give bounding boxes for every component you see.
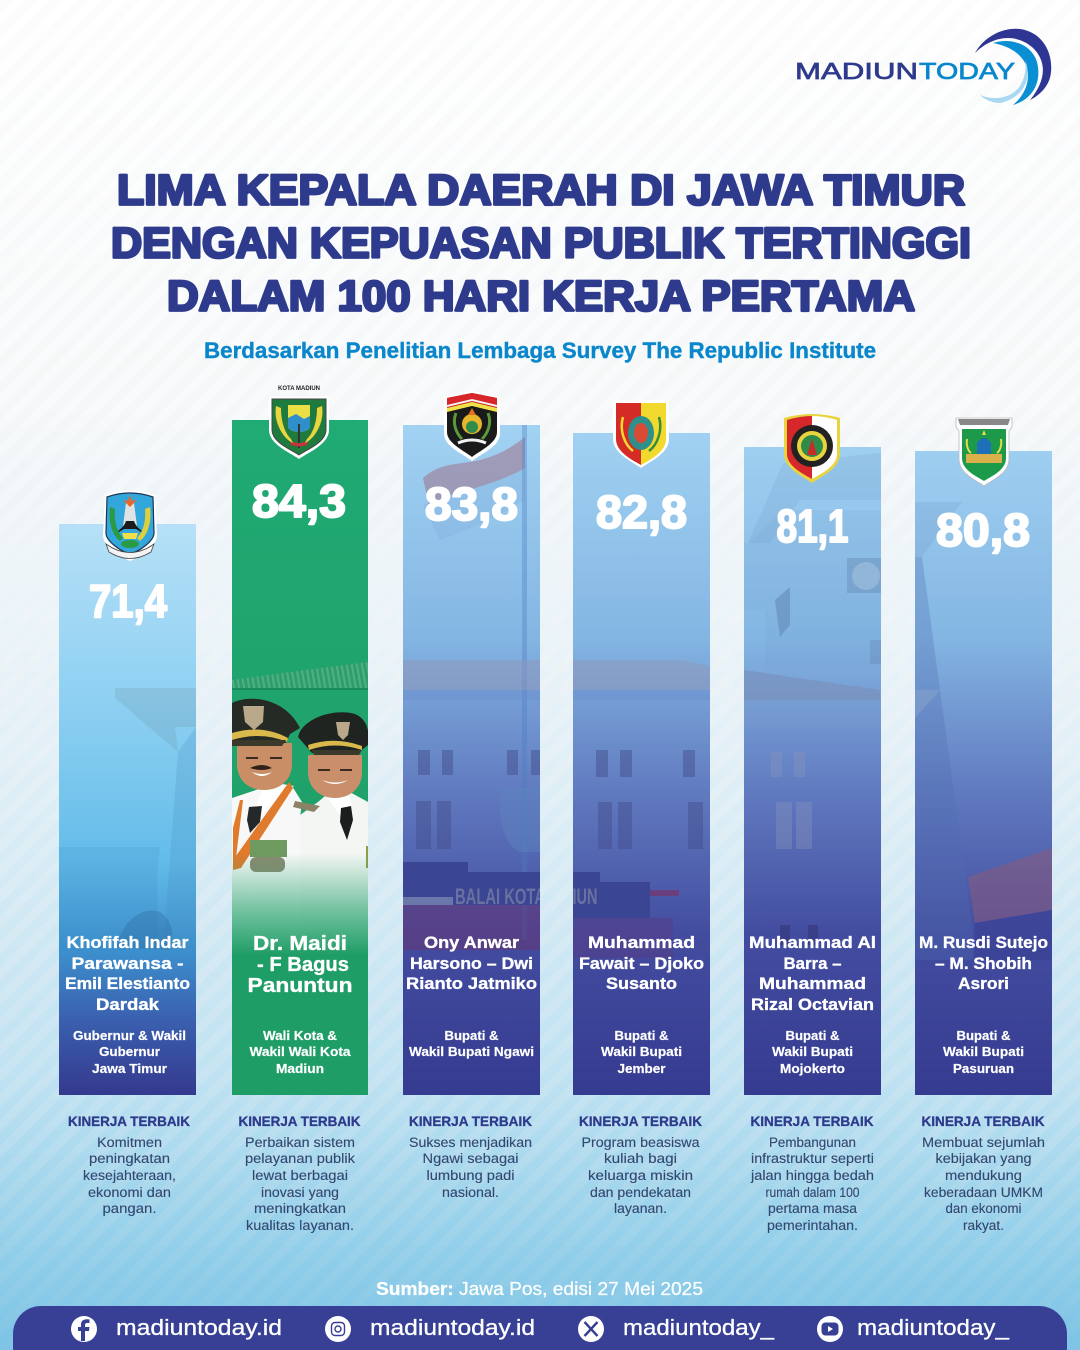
score: 82,8 bbox=[596, 486, 687, 538]
best performance bbox=[579, 1113, 702, 1216]
best performance: lumbung padi bbox=[426, 1168, 514, 1183]
name: Rizal Octavian bbox=[751, 995, 874, 1014]
best performance: mendukung bbox=[945, 1168, 1022, 1183]
name: Ony Anwar bbox=[424, 933, 519, 952]
position: Wakil Bupati bbox=[943, 1044, 1024, 1059]
position: Pasuruan bbox=[953, 1061, 1014, 1076]
name: Harsono – Dwi bbox=[410, 954, 533, 973]
name: - F Bagus bbox=[257, 954, 349, 976]
icon: facebook bbox=[71, 1316, 97, 1342]
column bar bbox=[573, 433, 710, 1095]
best performance bbox=[409, 1113, 532, 1200]
position: Wakil Bupati bbox=[772, 1044, 853, 1059]
score: 81,1 bbox=[776, 500, 848, 552]
crest bbox=[103, 490, 157, 561]
youtube handle: madiuntoday_ bbox=[857, 1315, 1010, 1340]
name bbox=[248, 933, 352, 997]
name bbox=[406, 933, 537, 993]
photo of officials bbox=[232, 662, 368, 950]
logo crescents bbox=[975, 29, 1051, 105]
person right bbox=[296, 712, 370, 960]
position: Wakil Bupati bbox=[601, 1044, 682, 1059]
column bar bbox=[403, 425, 540, 1095]
position: Gubernur & Wakil bbox=[73, 1028, 186, 1043]
panel: Muhammad Fawait 82,8 bbox=[572, 400, 710, 1216]
best performance: pelayanan publik bbox=[245, 1151, 355, 1166]
facebook handle: madiuntoday.id bbox=[116, 1315, 282, 1340]
best performance: infrastruktur seperti bbox=[751, 1151, 874, 1166]
social media footer bbox=[13, 1306, 1067, 1350]
position bbox=[409, 1028, 534, 1059]
best performance: Sukses menjadikan bbox=[409, 1135, 532, 1150]
position bbox=[943, 1028, 1024, 1076]
building backdrop: IUN bbox=[572, 884, 598, 909]
name: Asrori bbox=[958, 974, 1009, 993]
best performance: rakyat. bbox=[963, 1218, 1004, 1233]
best performance: Program beasiswa bbox=[582, 1135, 700, 1150]
column bar bbox=[744, 447, 881, 1095]
score: 71,4 bbox=[89, 575, 167, 627]
best performance: KINERJA TERBAIK bbox=[579, 1113, 702, 1129]
name: Khofifah Indar bbox=[66, 933, 189, 952]
position bbox=[601, 1028, 682, 1076]
best performance: Komitmen bbox=[97, 1135, 162, 1150]
name: Muhammad Al bbox=[749, 933, 876, 952]
position bbox=[73, 1028, 186, 1076]
footer bar bbox=[13, 1306, 1067, 1350]
name: Fawait – Djoko bbox=[579, 954, 704, 973]
name: Muhammad bbox=[759, 974, 866, 993]
panel: M. Rusdi Sutejo 80,8 bbox=[915, 418, 1052, 1233]
crest bbox=[956, 418, 1012, 486]
best performance: jalan hingga bedah bbox=[750, 1168, 874, 1183]
name: M. Rusdi Sutejo bbox=[919, 933, 1048, 952]
crest bbox=[784, 414, 840, 483]
best performance: pertama masa bbox=[768, 1201, 857, 1216]
best performance: pemerintahan. bbox=[767, 1218, 858, 1233]
logo wordmark: TODAY bbox=[919, 58, 1015, 84]
best performance: inovasi yang bbox=[261, 1185, 339, 1200]
best performance: KINERJA TERBAIK bbox=[409, 1113, 532, 1129]
panel: Muhammad Al Barra 81,1 bbox=[744, 414, 881, 1233]
best performance: ekonomi dan bbox=[88, 1185, 171, 1200]
position bbox=[250, 1028, 351, 1076]
position: Gubernur bbox=[99, 1044, 160, 1059]
best performance: kesejahteraan, bbox=[83, 1168, 176, 1183]
name: Parawansa - bbox=[72, 954, 184, 973]
position: Wakil Wali Kota bbox=[250, 1044, 351, 1059]
logo wordmark bbox=[795, 58, 1015, 84]
score: 84,3 bbox=[252, 475, 346, 527]
crest bbox=[613, 400, 669, 468]
icon: youtube bbox=[817, 1316, 843, 1342]
position bbox=[772, 1028, 853, 1076]
position: Bupati & bbox=[956, 1028, 1010, 1043]
name: Emil Elestianto bbox=[65, 974, 190, 993]
column bar bbox=[915, 451, 1052, 1095]
title bbox=[111, 166, 971, 320]
best performance: rumah dalam 100 bbox=[766, 1185, 860, 1200]
best performance: dan pendekatan bbox=[590, 1185, 691, 1200]
person left bbox=[232, 699, 320, 960]
best performance: pangan. bbox=[102, 1201, 156, 1216]
best performance bbox=[68, 1113, 190, 1216]
building backdrop bbox=[572, 660, 710, 958]
best performance bbox=[750, 1113, 874, 1233]
title: DALAM 100 HARI KERJA PERTAMA bbox=[167, 272, 915, 320]
best performance: meningkatkan bbox=[254, 1201, 346, 1216]
position: Wali Kota & bbox=[263, 1028, 337, 1043]
name: Susanto bbox=[606, 974, 677, 993]
best performance: keberadaan UMKM bbox=[924, 1185, 1043, 1200]
instagram handle: madiuntoday.id bbox=[370, 1315, 535, 1340]
best performance: kualitas layanan. bbox=[246, 1218, 354, 1233]
source note: Sumber: Jawa Pos, edisi 27 Mei 2025 bbox=[376, 1279, 703, 1299]
name bbox=[919, 933, 1048, 993]
best performance: kebijakan yang bbox=[936, 1151, 1032, 1166]
background bbox=[0, 290, 1080, 1350]
best performance bbox=[238, 1113, 360, 1233]
best performance: KINERJA TERBAIK bbox=[68, 1113, 190, 1129]
name: Muhammad bbox=[588, 933, 695, 952]
best performance: keluarga miskin bbox=[588, 1168, 693, 1183]
best performance: kuliah bagi bbox=[604, 1151, 677, 1166]
subtitle: Berdasarkan Penelitian Lembaga Survey The Republic Institute bbox=[204, 338, 876, 363]
score: 83,8 bbox=[425, 478, 518, 530]
icon: X bbox=[578, 1316, 604, 1342]
crest: KOTA MADIUN bbox=[278, 386, 320, 392]
position: Bupati & bbox=[786, 1028, 840, 1043]
logo wordmark: MADIUN bbox=[795, 58, 918, 84]
X handle: madiuntoday_ bbox=[623, 1315, 775, 1340]
building backdrop with flag bbox=[403, 425, 545, 950]
name bbox=[65, 933, 190, 1014]
position: Wakil Bupati Ngawi bbox=[409, 1044, 534, 1059]
crest bbox=[269, 386, 329, 459]
column bar bbox=[232, 420, 368, 1095]
name: Panuntun bbox=[248, 975, 352, 997]
best performance: KINERJA TERBAIK bbox=[750, 1113, 874, 1129]
best performance bbox=[922, 1113, 1045, 1233]
position: Bupati & bbox=[614, 1028, 668, 1043]
position: Jawa Timur bbox=[92, 1061, 167, 1076]
best performance: Pembangunan bbox=[769, 1135, 856, 1150]
panel: Ony Anwar 83,8 bbox=[403, 391, 545, 1200]
title: LIMA KEPALA DAERAH DI JAWA TIMUR bbox=[117, 166, 965, 214]
name: Dr. Maidi bbox=[253, 933, 347, 955]
position: Jember bbox=[618, 1061, 666, 1076]
best performance: KINERJA TERBAIK bbox=[922, 1113, 1044, 1129]
score: 80,8 bbox=[936, 504, 1030, 556]
icon: instagram bbox=[325, 1316, 351, 1342]
name bbox=[749, 933, 876, 1014]
position: Madiun bbox=[276, 1061, 324, 1076]
name bbox=[579, 933, 704, 993]
crest bbox=[444, 391, 500, 461]
best performance: dan ekonomi bbox=[946, 1201, 1022, 1216]
name: Barra – bbox=[784, 954, 842, 973]
best performance: layanan. bbox=[614, 1201, 667, 1216]
building backdrop bbox=[59, 688, 196, 950]
clock tower backdrop bbox=[744, 453, 881, 945]
name: Dardak bbox=[96, 995, 160, 1014]
best performance: peningkatan bbox=[89, 1151, 170, 1166]
best performance: Perbaikan sistem bbox=[245, 1135, 355, 1150]
best performance: KINERJA TERBAIK bbox=[238, 1113, 360, 1129]
position: Bupati & bbox=[444, 1028, 498, 1043]
building backdrop with flag: BALAI KOTA bbox=[455, 884, 545, 909]
panel: Khofifah 71,4 bbox=[59, 490, 196, 1216]
name: – M. Shobih bbox=[935, 954, 1032, 973]
best performance: lewat berbagai bbox=[252, 1168, 348, 1183]
best performance: nasional. bbox=[442, 1185, 499, 1200]
building backdrop bbox=[915, 502, 1052, 960]
title: DENGAN KEPUASAN PUBLIK TERTINGGI bbox=[111, 220, 971, 268]
best performance: Membuat sejumlah bbox=[922, 1135, 1045, 1150]
position: Mojokerto bbox=[780, 1061, 845, 1076]
logo: Madiun Today bbox=[795, 29, 1051, 105]
name: Rianto Jatmiko bbox=[406, 974, 537, 993]
column bar bbox=[59, 524, 196, 1095]
panel: Maidi 84,3 bbox=[232, 386, 370, 1233]
best performance: Ngawi sebagai bbox=[422, 1151, 518, 1166]
